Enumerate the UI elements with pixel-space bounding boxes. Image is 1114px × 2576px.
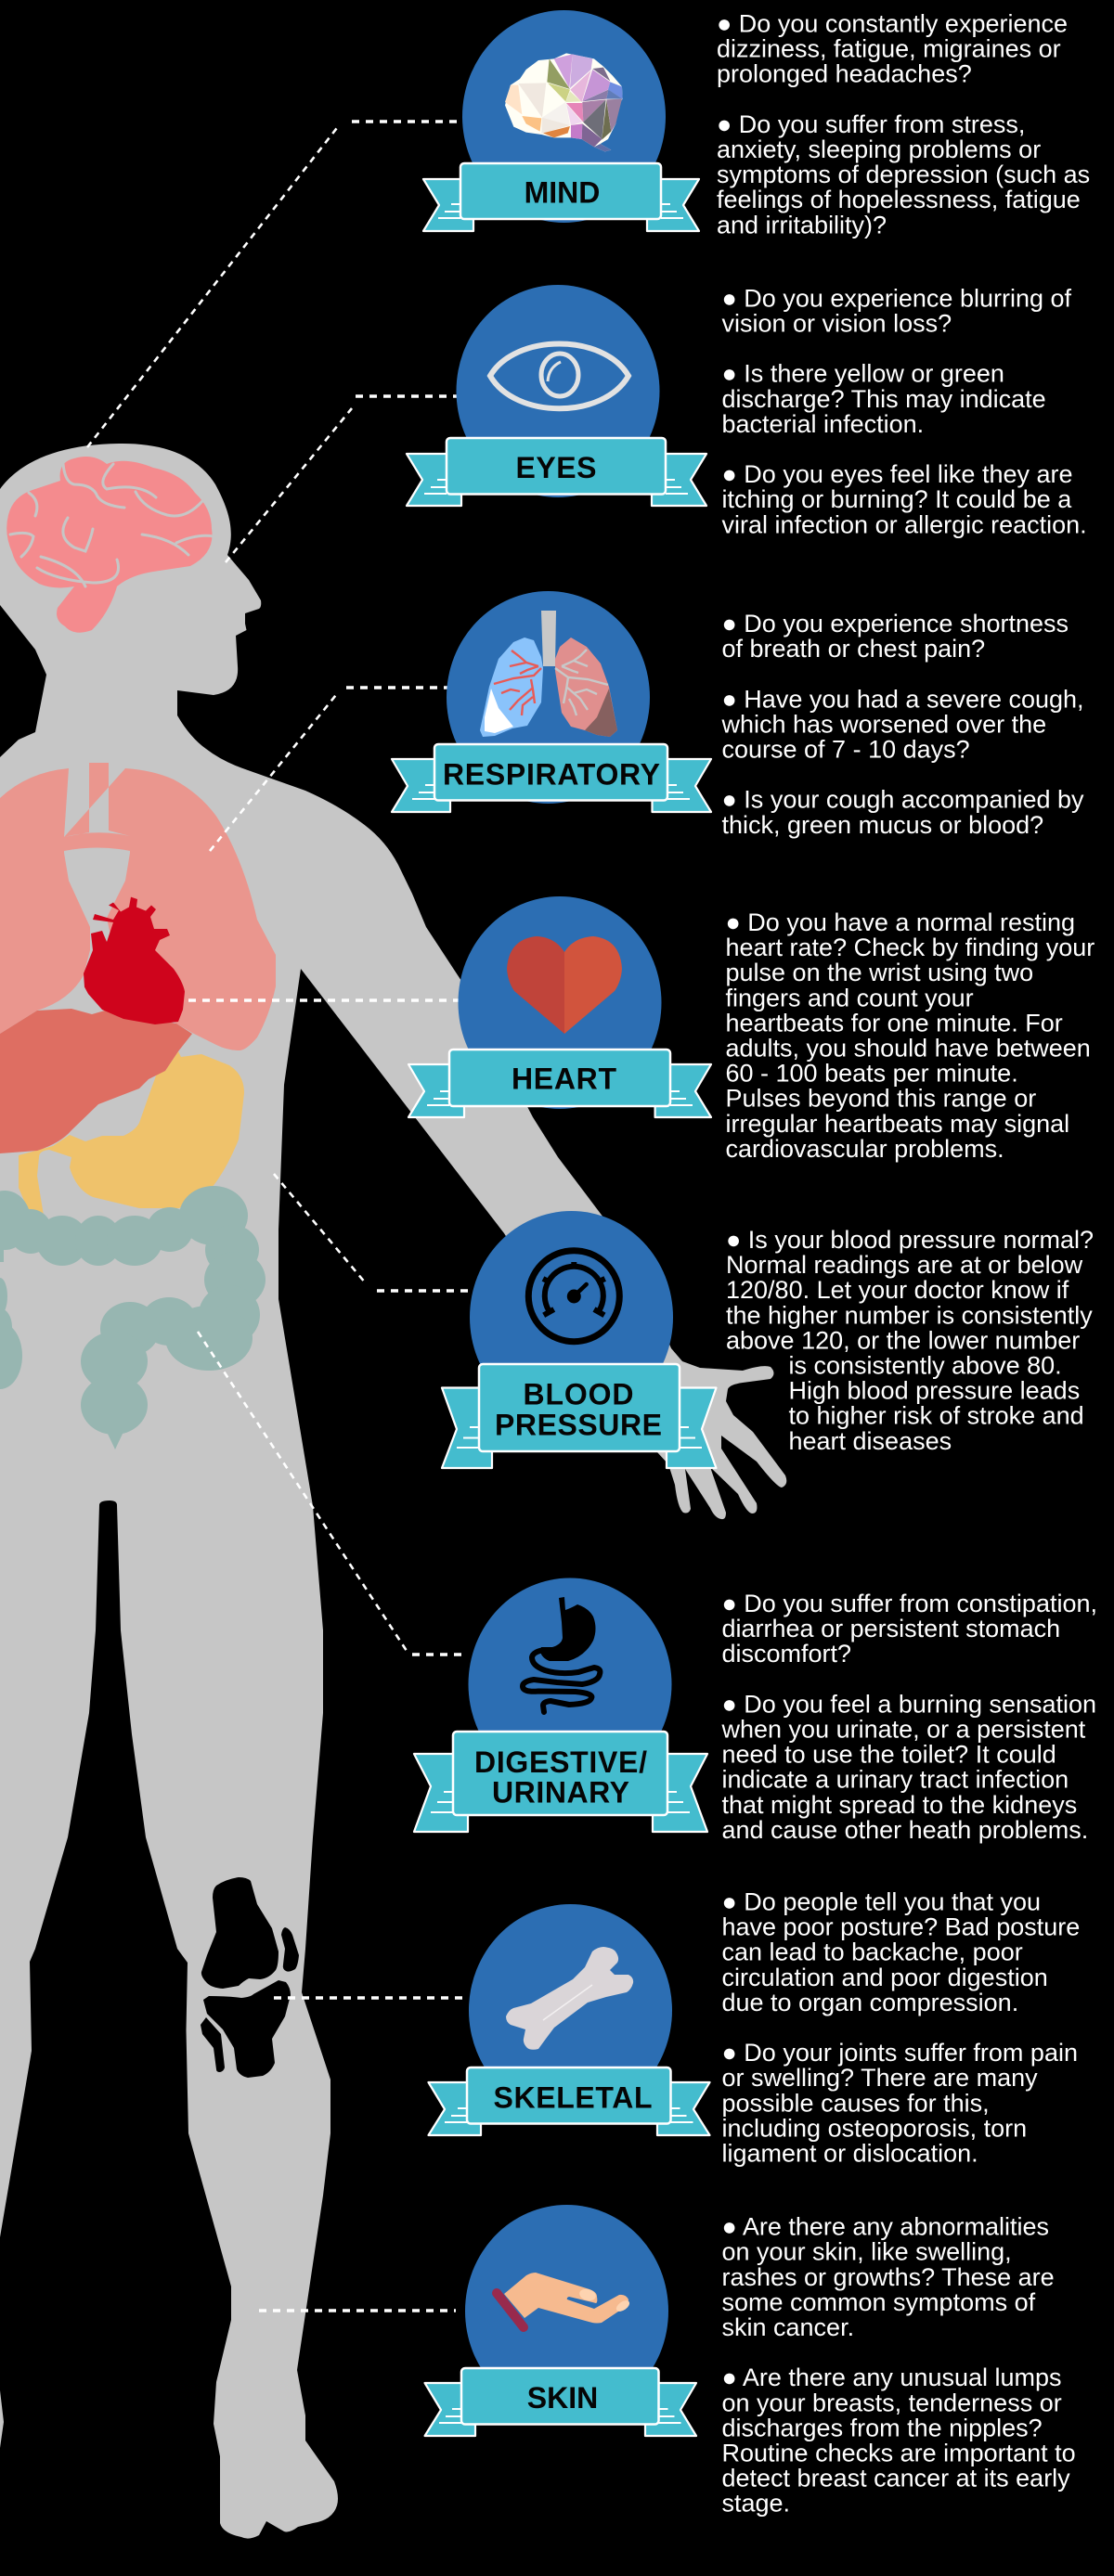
badge circle: skeletal <box>469 1904 672 2117</box>
ribbon: blood pressure: PRESSURE <box>495 1409 662 1442</box>
text block: digestive questions: discomfort? <box>722 1640 851 1668</box>
text block: eyes questions: discharge? This may indicate <box>722 385 1046 413</box>
text block: eyes questions: vision or vision loss? <box>722 310 952 338</box>
text block: skin questions: stage. <box>722 2490 790 2518</box>
text block: skeletal questions: ● Do your joints suffer from pain <box>722 2039 1078 2067</box>
ribbon: mind <box>423 163 699 231</box>
text block: blood pressure questions: ● Is your blood pressure normal? <box>726 1226 1094 1254</box>
text block: mind questions: ● Do you constantly experience <box>717 9 1068 37</box>
tibia <box>203 1980 291 2078</box>
connector: heart <box>188 998 460 1002</box>
text block: skeletal questions: can lead to backache, poor <box>722 1938 1023 1966</box>
text block: heart questions: 60 - 100 beats per minute. <box>726 1060 1018 1088</box>
panel: heart <box>188 896 1095 1163</box>
connector: skeletal <box>274 1996 469 2000</box>
lungs organ <box>0 763 276 1050</box>
text block: skeletal questions: or swelling? There are many <box>722 2064 1038 2092</box>
heart organ <box>84 897 185 1024</box>
ribbon: eyes: EYES <box>516 451 596 484</box>
text block: skin questions: skin cancer. <box>722 2313 854 2341</box>
icon: stomach and intestine <box>523 1597 600 1712</box>
connector: respiratory <box>210 688 447 851</box>
text block: mind questions: dizziness, fatigue, migraines or <box>717 35 1061 63</box>
text block: skeletal questions: have poor posture? Bad posture <box>722 1913 1080 1941</box>
text block: eyes questions: bacterial infection. <box>722 410 924 438</box>
text block: respiratory questions: ● Do you experience shortness <box>722 610 1069 638</box>
ribbon: skeletal: SKELETAL <box>494 2080 652 2114</box>
badge circle: digestive <box>468 1578 672 1791</box>
bottom left leg sliver <box>0 2390 4 2448</box>
panel: skeletal <box>274 1887 1080 2168</box>
ribbon: blood pressure <box>442 1364 717 1468</box>
text block: heart questions: Pulses beyond this range or <box>726 1085 1036 1113</box>
text block: heart questions: irregular heartbeats may signal <box>726 1110 1069 1138</box>
ribbon: skin: SKIN <box>527 2381 598 2415</box>
text block: digestive questions: and cause other heath problems. <box>722 1816 1088 1844</box>
panel: digestive urinary <box>198 1332 1097 1844</box>
text block: digestive questions: indicate a urinary tract infection <box>722 1766 1069 1794</box>
text block: mind questions: anxiety, sleeping problems or <box>717 135 1041 163</box>
panel: blood pressure <box>274 1174 1094 1468</box>
ribbon: skin <box>425 2368 696 2436</box>
ribbon: digestive: DIGESTIVE/ <box>474 1745 647 1779</box>
text block: blood pressure questions: Normal readings are at or below <box>726 1251 1083 1279</box>
ribbon: skeletal <box>429 2067 709 2135</box>
text block: skin questions: some common symptoms of <box>722 2288 1036 2316</box>
text block: digestive questions: need to use the toilet? It could <box>722 1741 1056 1769</box>
badge circle: heart <box>459 896 661 1109</box>
ribbon: blood pressure: BLOOD <box>524 1377 633 1410</box>
body silhouette <box>0 444 786 2539</box>
text block: eyes questions: viral infection or allergic reaction. <box>722 510 1087 538</box>
text block: skin questions: on your skin, like swelling, <box>722 2238 1012 2266</box>
text block: respiratory questions: course of 7 - 10 days? <box>722 735 970 763</box>
icon: pressure gauge <box>528 1251 619 1342</box>
text block: eyes questions: ● Do you experience blurring of <box>722 284 1072 312</box>
text block: skin questions: detect breast cancer at its early <box>722 2465 1070 2492</box>
text block: blood pressure questions: above 120, or the lower number <box>726 1326 1080 1354</box>
text block: heart questions: pulse on the wrist using two <box>726 959 1033 986</box>
brain folds <box>10 464 214 586</box>
icon: lungs <box>480 611 617 737</box>
ribbon: digestive: URINARY <box>492 1776 629 1810</box>
text block: blood pressure questions: 120/80. Let your doctor know if <box>726 1276 1069 1304</box>
panel: respiratory <box>210 591 1084 851</box>
ribbon: respiratory: RESPIRATORY <box>443 757 660 791</box>
text block: digestive questions: ● Do you feel a burning sensation <box>722 1690 1096 1718</box>
text block: eyes questions: itching or burning? It could be a <box>722 485 1072 513</box>
text block: respiratory questions: which has worsened over the <box>720 710 1046 738</box>
text block: respiratory questions: of breath or chest pain? <box>722 635 985 663</box>
text block: digestive questions: diarrhea or persistent stomach <box>722 1615 1060 1642</box>
text block: mind questions: prolonged headaches? <box>717 60 972 88</box>
text block: skin questions: ● Are there any unusual lumps <box>722 2363 1062 2391</box>
text block: skin questions: Routine checks are important to <box>722 2439 1076 2467</box>
ribbon: digestive <box>414 1732 707 1832</box>
icon: bone <box>506 1947 633 2050</box>
femur <box>201 1877 278 1989</box>
connector: blood pressure <box>274 1174 469 1291</box>
patella <box>281 1927 299 1972</box>
brain shape <box>6 457 213 633</box>
text block: heart questions: adults, you should have between <box>726 1034 1091 1062</box>
text block: skin questions: ● Are there any abnormalities <box>722 2213 1049 2241</box>
connector: eyes <box>226 396 459 562</box>
text block: blood pressure questions: High blood pressure leads <box>789 1377 1080 1405</box>
text block: eyes questions: ● Is there yellow or green <box>722 360 1004 388</box>
text block: skeletal questions: circulation and poor digestion <box>722 1964 1048 1991</box>
text block: blood pressure questions: to higher risk of stroke and <box>789 1402 1084 1430</box>
text block: eyes questions: ● Do you eyes feel like they are <box>722 460 1073 488</box>
stomach organ <box>19 1051 244 1216</box>
knee bones <box>201 1877 299 2078</box>
ribbon: heart <box>408 1050 711 1117</box>
fibula <box>201 2017 225 2072</box>
text block: blood pressure questions: heart diseases <box>789 1427 952 1455</box>
human body figure <box>0 444 786 2539</box>
text block: heart questions: heart rate? Check by finding your <box>726 934 1095 961</box>
panel: skin <box>259 2205 1076 2518</box>
text block: skeletal questions: possible causes for this, <box>722 2089 990 2117</box>
text block: skin questions: on your breasts, tenderness or <box>722 2389 1062 2416</box>
ribbon: eyes <box>407 438 706 506</box>
connector: mind <box>87 122 459 447</box>
text block: heart questions: ● Do you have a normal resting <box>726 908 1075 936</box>
text block: digestive questions: ● Do you suffer from constipation, <box>722 1590 1097 1617</box>
badge circle: blood pressure <box>470 1211 673 1423</box>
text block: blood pressure questions: the higher number is consistently <box>726 1301 1093 1329</box>
connector: skin <box>259 2309 456 2312</box>
ribbon: mind: MIND <box>525 176 600 210</box>
text block: skeletal questions: ligament or dislocation. <box>722 2140 978 2168</box>
panel: eyes <box>226 284 1087 562</box>
ribbon: heart: HEART <box>512 1062 616 1095</box>
text block: digestive questions: that might spread to the kidneys <box>722 1791 1077 1819</box>
text block: mind questions: symptoms of depression (such as <box>717 161 1090 188</box>
panel: mind <box>87 9 1090 447</box>
text block: respiratory questions: ● Is your cough accompanied by <box>722 786 1084 814</box>
liver organ <box>0 1009 192 1153</box>
text block: skeletal questions: due to organ compression. <box>722 1989 1018 2016</box>
text block: respiratory questions: thick, green mucus or blood? <box>722 811 1043 839</box>
connector: digestive <box>198 1332 461 1655</box>
icon: heart <box>507 936 622 1034</box>
text block: skin questions: discharges from the nipples? <box>722 2414 1043 2441</box>
text block: skin questions: rashes or growths? These are <box>722 2263 1055 2291</box>
text block: respiratory questions: ● Have you had a severe cough, <box>722 685 1084 713</box>
text block: blood pressure questions: is consistently above 80. <box>789 1351 1062 1379</box>
icon: low poly brain <box>505 53 623 151</box>
icon: hand <box>497 2273 631 2327</box>
text block: heart questions: heartbeats for one minute. For <box>726 1009 1063 1037</box>
text block: skeletal questions: ● Do people tell you that you <box>722 1887 1041 1915</box>
badge circle: mind <box>462 10 666 223</box>
text block: mind questions: and irritability)? <box>717 211 887 238</box>
icon: eye <box>490 343 628 408</box>
badge circle: respiratory <box>447 591 650 804</box>
text block: digestive questions: when you urinate, or a persistent <box>720 1715 1086 1743</box>
large intestine organ <box>0 1186 266 1449</box>
ribbon: respiratory <box>392 744 711 812</box>
text block: heart questions: fingers and count your <box>726 984 974 1011</box>
badge circle: skin <box>465 2205 668 2417</box>
text block: heart questions: cardiovascular problems. <box>726 1135 1004 1163</box>
badge circle: eyes <box>457 285 659 497</box>
brain organ <box>6 457 214 633</box>
text block: skeletal questions: including osteoporosis, torn <box>722 2114 1027 2142</box>
text block: mind questions: ● Do you suffer from stress, <box>717 110 1025 138</box>
text block: mind questions: feelings of hopelessness, fatigue <box>717 186 1081 213</box>
